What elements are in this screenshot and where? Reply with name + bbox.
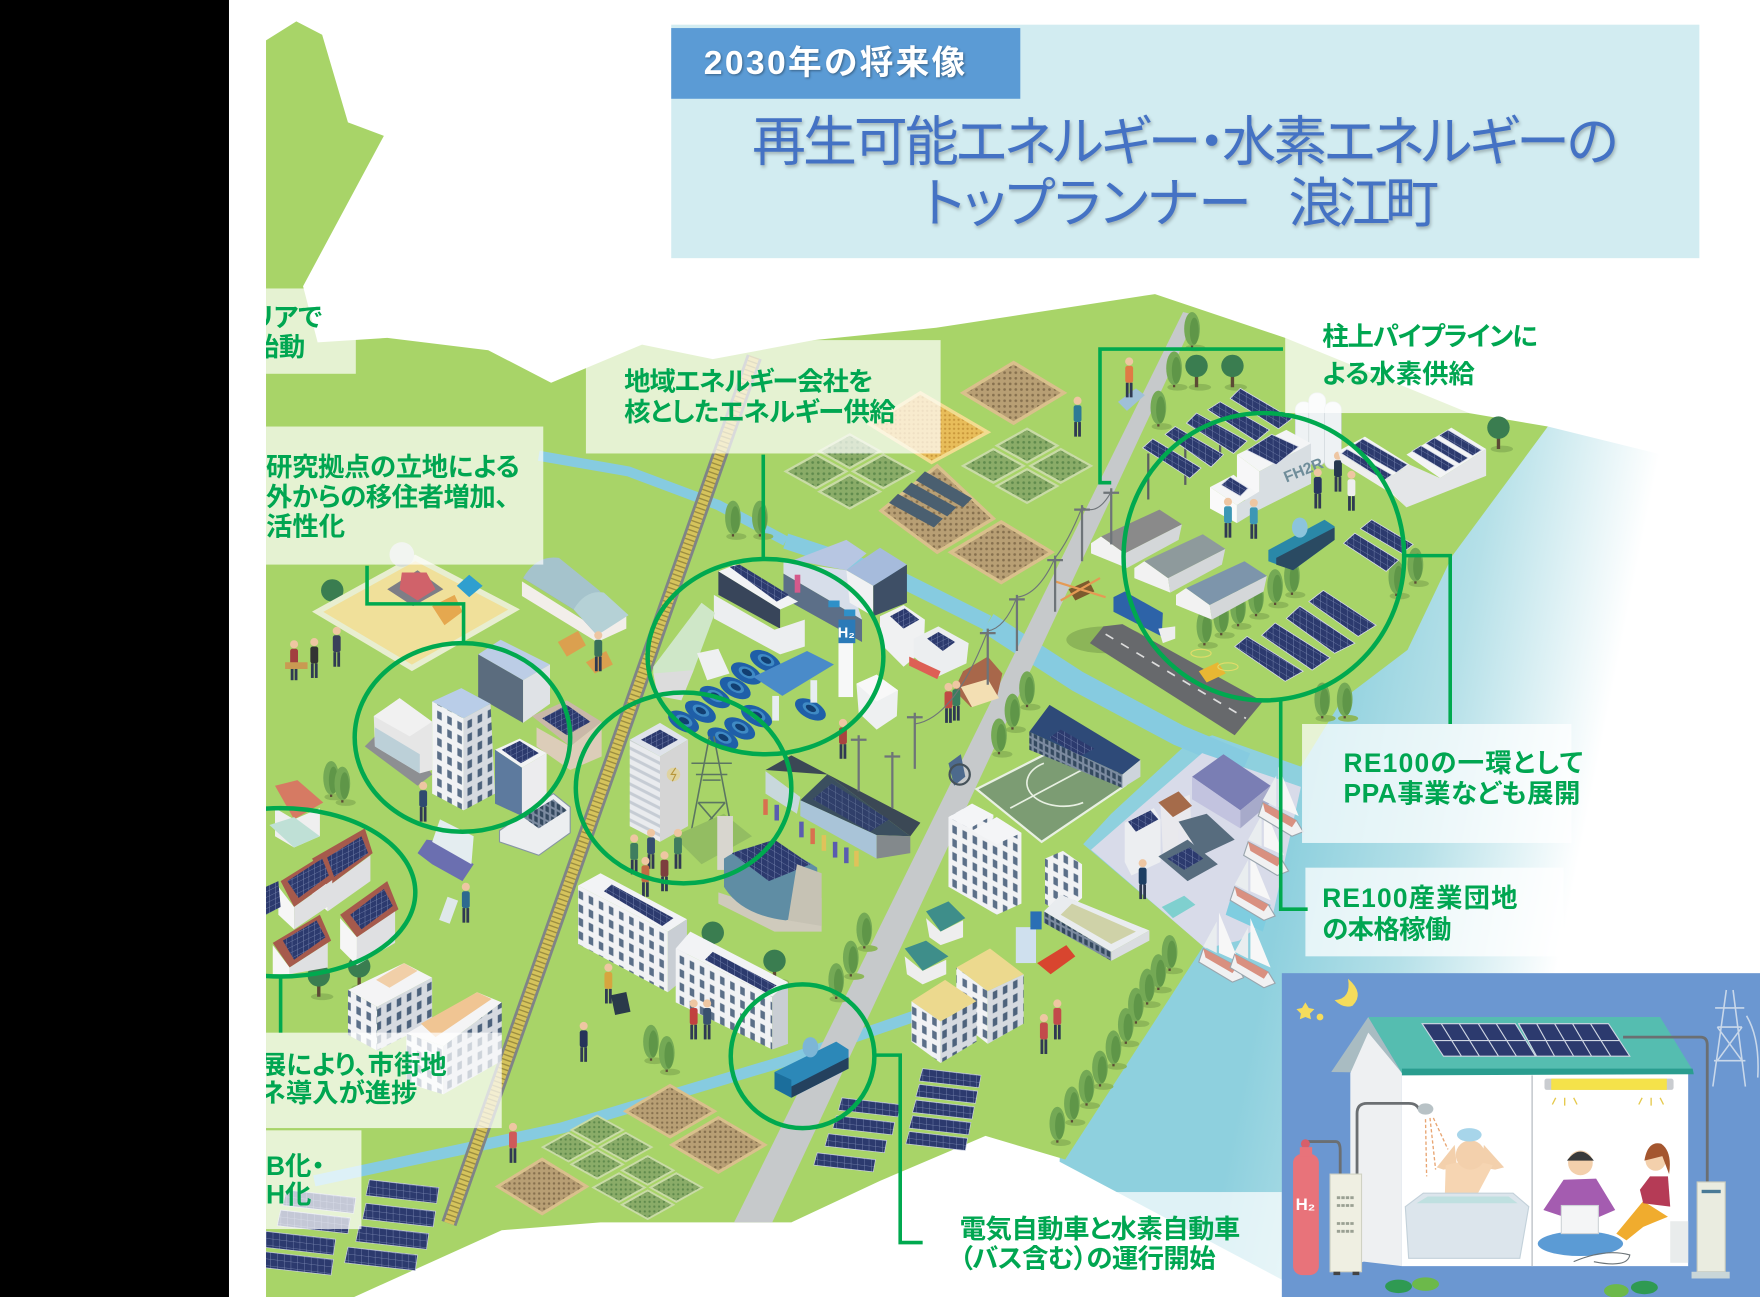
callout: vehicles: [960, 1192, 1282, 1297]
hydrogen plant FH2R: [1210, 393, 1355, 539]
hydrogen station area: [653, 540, 907, 759]
hydrogen tank: [1293, 1139, 1319, 1275]
bather: [1405, 1103, 1529, 1258]
bushes: [1385, 1277, 1658, 1297]
shops along the road: [880, 605, 1002, 786]
house: [1331, 1017, 1694, 1266]
rivers: [314, 456, 1246, 1181]
callout: regional energy company: 地域エネルギー会社を: [624, 367, 873, 397]
fuel cell unit: [1330, 1174, 1362, 1275]
main title: トップランナー: [923, 174, 1252, 234]
ceiling lamp: [1544, 1079, 1674, 1106]
farm fields lower: [498, 1085, 765, 1219]
power lines: [851, 488, 1119, 808]
callout: area activity: エリアで: [226, 303, 322, 333]
residents in the park: [509, 964, 1061, 1163]
main title: 浪江町: [1289, 174, 1439, 234]
callout: area activity: [226, 288, 356, 374]
callout: vehicles: 電気自動車と水素自動車: [960, 1214, 1240, 1244]
callout: hydrogen pipeline: よる水素供給: [1322, 359, 1476, 389]
land mass: [266, 21, 1548, 1297]
callout: research base: 活性化: [266, 511, 345, 541]
hydrogen delivery truck: [418, 819, 474, 924]
connector lines: [281, 349, 1450, 1243]
callout: research base: 外からの移住者増加、: [266, 482, 508, 512]
callout: RE100 industrial park: の本格稼働: [1322, 914, 1451, 944]
railway: [449, 357, 754, 1223]
highlight circles: [146, 413, 1404, 1128]
callout: progress in the town: 展により、市街地: [260, 1050, 447, 1080]
long hall with dark roof: [763, 755, 920, 867]
callout: regional energy company: 核としたエネルギー供給: [624, 397, 896, 427]
harbor buildings: [1125, 754, 1271, 932]
cypress trees: [323, 312, 1429, 1146]
business district buildings: [365, 640, 602, 855]
heading tab: 2030 vision: 2030年の将来像: [704, 44, 966, 82]
energy company tower and pylon: [630, 723, 752, 897]
houses with solar: [266, 780, 398, 974]
inset: hydrogen-powered home at night: [1282, 973, 1760, 1297]
callout: area activity: 始動: [253, 332, 305, 362]
callout: RE100 industrial park: RE100産業団地: [1322, 883, 1518, 913]
boats and yachts: [1199, 767, 1303, 988]
callout: progress in the town: ネ導入が進捗: [260, 1078, 418, 1108]
callout: RE100 PPA: [1302, 724, 1583, 843]
rooftop solar panels: [1422, 1024, 1630, 1056]
man with laptop: [1538, 1151, 1623, 1256]
callout: RE100 PPA: RE100の一環として: [1344, 748, 1583, 778]
apartments center: [578, 873, 788, 1049]
apartment blocks lower left: [348, 963, 502, 1094]
solar fields lower middle: [814, 1069, 981, 1172]
pipes: [1305, 1037, 1707, 1182]
main title: 再生可能エネルギー・水素エネルギーの: [752, 113, 1619, 173]
callout: ZEB ZEH: H化: [266, 1179, 311, 1209]
main title: [752, 113, 1619, 234]
callout: ZEB ZEH: B化・: [266, 1151, 325, 1181]
callout: ZEB ZEH: [266, 1130, 361, 1229]
callout: research base: [266, 427, 543, 565]
callout: hydrogen pipeline: [1285, 320, 1571, 413]
farm fields upper: [786, 363, 1091, 583]
heading tab: 2030 vision: [671, 28, 1020, 99]
callout: vehicles: （バス含む）の運行開始: [960, 1243, 1216, 1273]
callout: research base: 研究拠点の立地による: [266, 452, 520, 482]
harbor area: [1091, 753, 1301, 948]
hydrogen bus at plant: [1268, 517, 1335, 570]
east solar roof building: [1338, 428, 1486, 507]
solar arrays south: [1235, 520, 1413, 681]
callout: RE100 industrial park: [1305, 868, 1564, 956]
drones: [1055, 578, 1238, 682]
road: [734, 312, 1197, 1222]
scooter and pedestrian: [1074, 357, 1145, 437]
black left margin: [0, 0, 229, 1297]
icon: pylon: [1713, 990, 1758, 1087]
delivery truck: [1113, 592, 1175, 643]
sea: [1060, 427, 1661, 1280]
hydrogen station area: H₂: [838, 626, 855, 642]
solar fields lower left: [260, 1180, 439, 1275]
hydrogen plant FH2R: FH2R: [1281, 455, 1326, 486]
title panel: [671, 25, 1699, 258]
woman on phone: [1574, 1143, 1688, 1264]
plant sheds: [1091, 510, 1267, 620]
solar sharing farm: [881, 466, 993, 552]
callout: RE100 PPA: PPA事業なども展開: [1344, 779, 1580, 809]
battery unit: [1692, 1182, 1730, 1278]
icon: moon and stars: [1296, 979, 1358, 1020]
dome building: [522, 557, 629, 673]
park: [285, 542, 514, 680]
solar arrays north: [1143, 388, 1292, 499]
hydrogen tank: H₂: [1296, 1195, 1315, 1214]
callout: progress in the town: [260, 1033, 502, 1128]
round trees: [308, 355, 1513, 1000]
callout: hydrogen pipeline: 柱上パイプラインに: [1322, 322, 1538, 352]
glass round building: [718, 840, 822, 932]
callout: regional energy company: [586, 340, 941, 453]
east side buildings and court: [905, 705, 1149, 1063]
runway: [1066, 624, 1263, 735]
bus on lower road: [774, 1037, 849, 1098]
